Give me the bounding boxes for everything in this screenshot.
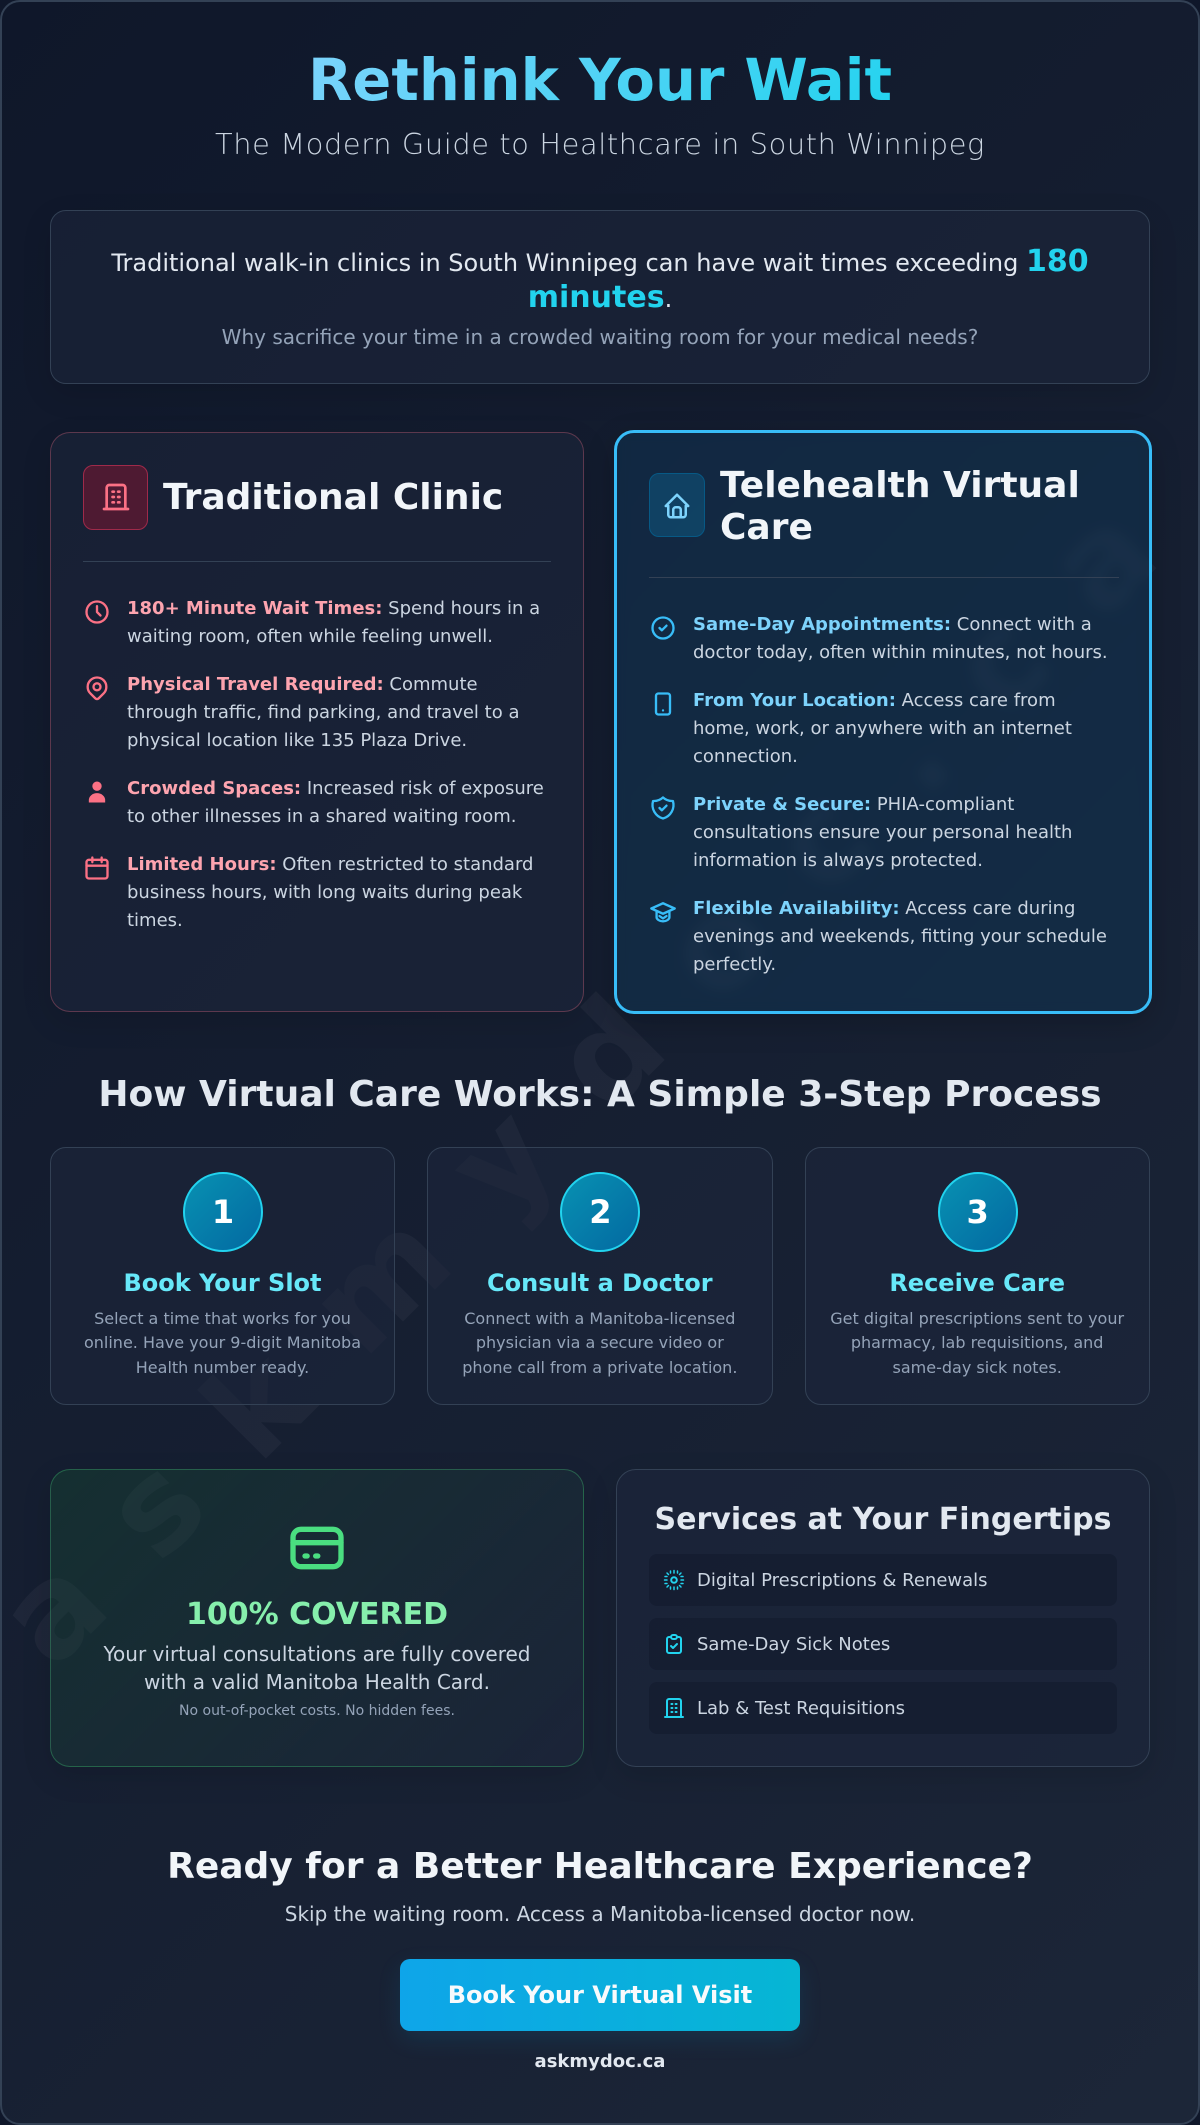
step title 2: Consult a Doctor (487, 1269, 713, 1297)
step text 3: pharmacy, lab requisitions, and (851, 1333, 1103, 1352)
service row: lab: Lab & Test Requisitions (697, 1698, 905, 1719)
step 1 (50, 1147, 395, 1405)
icon: credit card (290, 1526, 344, 1570)
step text 2: physician via a secure video or (476, 1333, 724, 1352)
panel: telehealth virtual care (614, 430, 1152, 1014)
list item: wait times: 180+ Minute Wait Times: Spend hours in a (127, 598, 540, 619)
step text 3: same-day sick notes. (893, 1358, 1062, 1377)
step 2 (427, 1147, 773, 1405)
icon: clinic building (83, 465, 148, 530)
step number 3: 3 (967, 1193, 989, 1231)
step text 1: online. Have your 9-digit Manitoba (84, 1333, 361, 1352)
list item: crowded: to other illnesses in a shared waiting room. (127, 806, 516, 827)
subtitle: The Modern Guide to Healthcare in South Winnipeg (215, 127, 985, 161)
step number 1: 1 (212, 1193, 234, 1231)
coverage text: Your virtual consultations are fully covered (104, 1642, 530, 1666)
list item: same-day (651, 614, 1108, 663)
panel: intro (50, 210, 1150, 384)
list item: crowded: Crowded Spaces: Increased risk of exposure (127, 778, 544, 799)
step text 3 (830, 1309, 1124, 1377)
title: Rethink Your Wait (308, 47, 892, 114)
coverage text (104, 1642, 530, 1694)
divider (649, 577, 1119, 578)
cta subtext: Skip the waiting room. Access a Manitoba-licensed doctor now. (285, 1902, 915, 1926)
list item: travel: physical location like 135 Plaza Drive. (127, 730, 467, 751)
cta button: Book Your Virtual Visit (448, 1981, 752, 2009)
panel: services (616, 1469, 1150, 1767)
list item: location: From Your Location: Access care from (693, 690, 1056, 711)
list item: private: Private & Secure: PHIA-compliant (693, 794, 1014, 815)
list item: wait times (85, 598, 540, 647)
step number 2: 2 (589, 1193, 611, 1231)
step number 3 (938, 1172, 1018, 1252)
step text 1 (84, 1309, 361, 1377)
list item: location: home, work, or anywhere with an internet (693, 718, 1072, 739)
list item: limited hours: Limited Hours: Often restricted to standard (127, 854, 533, 875)
service row: sick notes (649, 1618, 1117, 1670)
list item: same-day: doctor today, often within minutes, not hours. (693, 642, 1108, 663)
step number 1 (183, 1172, 263, 1252)
service row: lab (649, 1682, 1117, 1734)
website: askmydoc.ca (535, 2051, 665, 2072)
service row: prescriptions: Digital Prescriptions & Renewals (697, 1570, 988, 1591)
panel: traditional clinic (50, 432, 584, 1012)
intro statement: Traditional walk-in clinics in South Winnipeg can have wait times exceeding 180 (111, 244, 1089, 279)
list item: travel (86, 674, 519, 751)
intro question: Why sacrifice your time in a crowded waiting room for your medical needs? (222, 325, 978, 349)
step text 1: Health number ready. (136, 1358, 309, 1377)
panel: coverage (50, 1469, 584, 1767)
step number 2 (560, 1172, 640, 1252)
list item: travel: through traffic, find parking, and travel to a (127, 702, 519, 723)
cta button (400, 1959, 800, 2031)
list item: flexible: Flexible Availability: Access care during (693, 898, 1075, 919)
intro statement: minutes. (528, 280, 672, 314)
heading: how it works: How Virtual Care Works: A Simple 3-Step Process (98, 1074, 1102, 1115)
heading: traditional clinic: Traditional Clinic (163, 477, 503, 518)
list item: limited hours: business hours, with long waits during peak (127, 882, 522, 903)
service row: prescriptions (649, 1554, 1117, 1606)
cta heading: Ready for a Better Healthcare Experience? (167, 1846, 1033, 1887)
coverage note: No out-of-pocket costs. No hidden fees. (179, 1703, 455, 1719)
list item: travel: Physical Travel Required: Commute (127, 674, 478, 695)
icon: home (649, 473, 705, 537)
heading: telehealth: Care (720, 507, 813, 548)
step text 3: Get digital prescriptions sent to your (830, 1309, 1124, 1328)
step text 1: Select a time that works for you (94, 1309, 351, 1328)
list item: crowded (88, 778, 544, 827)
step text 2: Connect with a Manitoba-licensed (464, 1309, 735, 1328)
step text 2 (462, 1309, 737, 1377)
heading: telehealth: Telehealth Virtual (720, 465, 1080, 506)
services heading: Services at Your Fingertips (655, 1502, 1111, 1537)
heading: telehealth (720, 465, 1080, 548)
list item: private: consultations ensure your personal health (693, 822, 1072, 843)
coverage text: with a valid Manitoba Health Card. (144, 1670, 490, 1694)
list item: same-day: Same-Day Appointments: Connect with a (693, 614, 1092, 635)
service row: sick notes: Same-Day Sick Notes (697, 1634, 890, 1655)
list item: flexible: evenings and weekends, fitting your schedule (693, 926, 1107, 947)
list item: flexible: perfectly. (693, 954, 776, 975)
list item: limited hours: times. (127, 910, 183, 931)
list item: private (651, 794, 1072, 871)
step text 2: phone call from a private location. (462, 1358, 737, 1377)
list item: location (654, 690, 1072, 767)
intro statement (111, 244, 1089, 314)
list item: flexible (650, 898, 1107, 975)
list item: private: information is always protected. (693, 850, 983, 871)
step title 3: Receive Care (889, 1269, 1065, 1297)
list item: location: connection. (693, 746, 798, 767)
list item: limited hours (85, 854, 533, 931)
step title 1: Book Your Slot (124, 1269, 322, 1297)
coverage headline: 100% COVERED (186, 1597, 448, 1632)
step 3 (805, 1147, 1150, 1405)
list item: wait times: waiting room, often while feeling unwell. (127, 626, 493, 647)
divider (83, 561, 551, 562)
